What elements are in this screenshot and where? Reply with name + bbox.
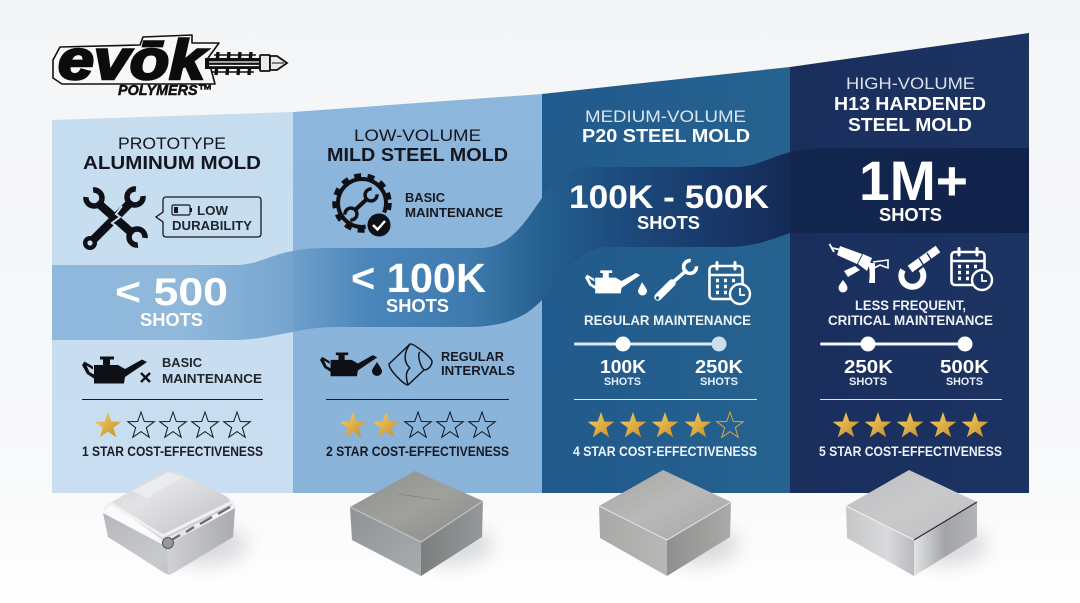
shot band: low-volume (293, 198, 542, 332)
text: basic maintenance: MAINTENANCE (405, 205, 503, 220)
icon: oil can with drop (320, 352, 382, 376)
text: regular intervals: INTERVALS (441, 363, 515, 378)
icon: calendar with clock (952, 248, 992, 290)
metric: 100K to 500K shots (569, 179, 769, 233)
shot band: high-volume (790, 148, 1029, 233)
logo: Evok Polymers (53, 28, 287, 99)
icon: gear with wrench and check (334, 176, 392, 238)
metric: 100K to 500K shots: 100K - 500K (569, 179, 769, 215)
heading: medium-volume P20 steel mold: MEDIUM-VOLUME (585, 107, 746, 126)
logo: Evok Polymers: evōk (58, 28, 208, 91)
text: basic maintenance: BASIC (162, 355, 203, 370)
heading: high-volume H13 hardened steel mold: STEEL MOLD (848, 114, 972, 135)
panel: prototype aluminum mold (52, 112, 293, 493)
rating: 2 stars (326, 412, 509, 459)
heading: high-volume H13 hardened steel mold (834, 74, 986, 135)
rating: 2 stars: 2 STAR COST-EFFECTIVENESS (326, 444, 509, 459)
slider: 250K to 500K shots: SHOTS (946, 376, 983, 388)
panel: high-volume H13 hardened steel mold (790, 33, 1029, 493)
text: basic maintenance: BASIC (405, 190, 446, 205)
metric: 1M+ shots: SHOTS (879, 205, 942, 225)
image: mild steel block (350, 471, 492, 576)
slider: 100K to 250K shots: SHOTS (700, 376, 738, 388)
icon: white wrench (656, 259, 698, 300)
slider: 100K to 250K shots: 100K (600, 357, 646, 377)
slider: 250K to 500K shots (820, 336, 989, 388)
icon: micrometer (901, 249, 938, 287)
text: less frequent critical maintenance: CRITICAL MAINTENANCE (828, 313, 993, 328)
icon: cloth (389, 344, 432, 385)
heading: medium-volume P20 steel mold: P20 STEEL MOLD (582, 125, 750, 146)
slider: 100K to 250K shots (574, 336, 743, 388)
callout: low durability (156, 197, 261, 237)
rating: 1 star: 1 STAR COST-EFFECTIVENESS (82, 444, 263, 459)
text: regular intervals (441, 349, 515, 378)
metric: under 100K shots: < 100K (351, 255, 486, 301)
text: basic maintenance: MAINTENANCE (162, 371, 262, 386)
shot band: prototype (52, 251, 293, 340)
rating: 1 star (82, 412, 263, 459)
image: H13 hardened steel block (846, 470, 987, 576)
metric: 1M+ shots: 1M+ (859, 149, 968, 212)
panel: low-volume mild steel mold (293, 94, 542, 493)
rating: 5 stars (819, 412, 1002, 459)
slider: 100K to 250K shots: SHOTS (604, 376, 641, 388)
heading: low-volume mild steel mold: LOW-VOLUME (354, 126, 481, 145)
text: less frequent critical maintenance (828, 298, 993, 328)
callout: low durability: DURABILITY (172, 218, 252, 233)
metric: under 500 shots: SHOTS (140, 310, 203, 330)
metric: under 100K shots: SHOTS (386, 296, 449, 316)
logo: Evok Polymers: POLYMERS™ (118, 82, 212, 99)
icon: broken crossed wrenches (83, 187, 147, 250)
rating: 5 stars: 5 STAR COST-EFFECTIVENESS (819, 444, 1002, 459)
metric: under 500 shots: < 500 (115, 271, 228, 314)
heading: low-volume mild steel mold (327, 126, 508, 165)
icon: calendar with clock (710, 262, 750, 304)
heading: prototype aluminum mold (83, 134, 261, 173)
text: regular maintenance: REGULAR MAINTENANCE (584, 313, 751, 328)
slider: 250K to 500K shots: SHOTS (849, 376, 887, 388)
metric: under 500 shots (115, 271, 228, 330)
text: regular intervals: REGULAR (441, 349, 505, 364)
shot band: medium-volume (542, 152, 790, 300)
icon: caulking gun (830, 244, 888, 292)
callout: low durability: LOW (197, 203, 229, 218)
slider: 100K to 250K shots: 250K (695, 357, 743, 377)
heading: prototype aluminum mold: PROTOTYPE (118, 134, 226, 153)
rating: 4 stars (573, 412, 757, 459)
panel: medium-volume P20 steel mold (542, 67, 790, 493)
heading: high-volume H13 hardened steel mold: HIGH-VOLUME (846, 74, 975, 93)
text: basic maintenance (405, 190, 503, 220)
metric: 100K to 500K shots: SHOTS (637, 213, 700, 233)
icon: oil can with cross (82, 356, 150, 384)
heading: prototype aluminum mold: ALUMINUM MOLD (83, 152, 261, 173)
image: rough aluminum block (103, 472, 247, 575)
slider: 250K to 500K shots: 250K (844, 357, 893, 377)
heading: medium-volume P20 steel mold (582, 107, 750, 146)
text: less frequent critical maintenance: LESS FREQUENT, (855, 298, 966, 313)
image: P20 steel block (599, 470, 739, 576)
text: basic maintenance (162, 355, 262, 386)
rating: 4 stars: 4 STAR COST-EFFECTIVENESS (573, 444, 757, 459)
heading: high-volume H13 hardened steel mold: H13 HARDENED (834, 93, 986, 114)
slider: 250K to 500K shots: 500K (940, 357, 989, 377)
heading: low-volume mild steel mold: MILD STEEL MOLD (327, 144, 508, 165)
icon: white oil can (585, 270, 647, 296)
